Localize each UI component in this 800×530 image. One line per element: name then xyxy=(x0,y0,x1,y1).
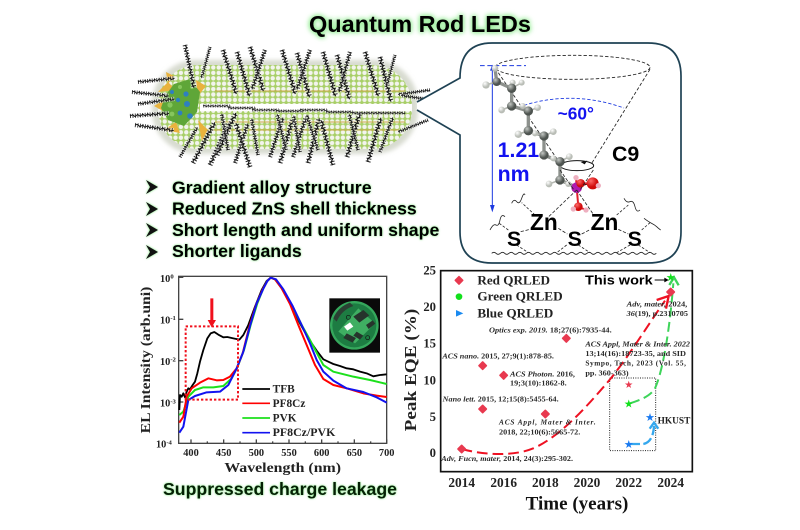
x axis tick labels: 2022 xyxy=(615,475,642,490)
plot frame xyxy=(441,271,692,472)
x axis tick labels: 2020 xyxy=(574,475,601,490)
leakage highlight box xyxy=(186,326,238,400)
length arrow 1.21 nm: nm xyxy=(498,162,530,186)
green trend arrow xyxy=(630,277,679,403)
angle label: ~60° xyxy=(558,103,594,123)
y axis tick labels: 5 xyxy=(430,410,436,424)
ZnS surface labels: Zn xyxy=(530,209,558,235)
x axis tick labels: 700 xyxy=(379,448,394,459)
EL spectrum chart xyxy=(138,274,394,476)
y axis tick labels: 10 xyxy=(423,373,436,387)
HKUST dotted box xyxy=(610,378,656,451)
legend: PVK xyxy=(273,412,297,424)
x axis title: Wavelength (nm) xyxy=(224,461,341,476)
x axis tick labels: 2018 xyxy=(532,475,559,490)
blue data points xyxy=(623,412,655,450)
ZnS surface bonds xyxy=(490,170,661,254)
illustration: quantum rod with ligands xyxy=(130,45,433,167)
citations: Adv, mater, 2024, xyxy=(626,300,688,309)
plot frame and ticks xyxy=(179,276,387,443)
60 degree dashed arc xyxy=(524,98,624,108)
length arrow 1.21 nm xyxy=(480,65,539,212)
red arrow xyxy=(208,298,216,327)
y axis tick labels: 10 xyxy=(160,399,170,410)
x axis tick labels: 500 xyxy=(249,448,264,459)
left ligands xyxy=(130,77,175,131)
citations: Nano lett. 2015, 12;15(8):5455-64. xyxy=(442,394,559,403)
legend xyxy=(242,383,336,439)
citations: pp. 360-363) xyxy=(585,368,629,377)
y axis title: Peak EQE (%) xyxy=(401,309,420,431)
y axis tick labels: -3 xyxy=(170,398,177,405)
red trend arrow xyxy=(462,296,669,454)
citations: Optics exp. 2019. 18;27(6):7935-44. xyxy=(489,325,612,334)
x axis tick labels: 650 xyxy=(347,448,362,459)
blue data points: ★ xyxy=(645,412,655,423)
legend: Blue QRLED xyxy=(477,305,553,320)
chain label C9: C9 xyxy=(612,142,639,166)
ZnS surface labels: S xyxy=(628,227,642,251)
citations: 2018, 22;10(6):5665-72. xyxy=(499,428,581,437)
x axis title: Time (years) xyxy=(526,494,628,515)
y axis tick labels: 10 xyxy=(160,274,170,285)
bullet 4: Shorter ligands xyxy=(172,241,302,261)
PF8Cz curve xyxy=(179,278,387,423)
callout bubble: ligand detail xyxy=(417,43,681,263)
y axis tick labels xyxy=(423,263,436,460)
EQE timeline chart xyxy=(401,263,692,515)
y axis tick labels: 0 xyxy=(430,446,436,460)
green data points: ★ xyxy=(623,399,633,410)
legend: PF8Cz/PVK xyxy=(273,427,336,439)
citations: ACS Appl, Mater & Inter. xyxy=(498,418,596,427)
legend: Green QRLED xyxy=(477,289,563,304)
caption: suppressed charge leakage: Suppressed charge leakage xyxy=(163,479,397,499)
y axis tick labels: 25 xyxy=(423,263,436,277)
HKUST label: HKUST xyxy=(658,416,691,426)
right ligands xyxy=(398,89,433,133)
y axis tick labels: -2 xyxy=(170,357,177,364)
y axis tick labels: 15 xyxy=(423,337,436,351)
central ligands xyxy=(203,105,406,114)
blue data points: ★ xyxy=(623,439,633,450)
y axis tick labels: 20 xyxy=(423,300,436,314)
rotation arrow xyxy=(560,161,594,171)
legend xyxy=(477,272,563,320)
legend: TFB xyxy=(273,383,295,395)
y axis tick labels xyxy=(156,274,177,451)
ZnS surface labels: Zn xyxy=(591,209,618,235)
PF8Cz/PVK curve xyxy=(179,278,387,433)
feature bullet list xyxy=(146,178,439,261)
citations: Sympo, Tech, 2023 (Vol. 55, xyxy=(585,359,686,368)
bullet 1: Gradient alloy structure xyxy=(172,178,372,198)
rod lattice body xyxy=(152,60,418,154)
red star 2022: ★ xyxy=(624,380,633,391)
ZnS surface labels: S xyxy=(507,227,521,251)
rod core xyxy=(154,72,208,142)
legend: PF8Cz xyxy=(273,398,305,410)
TFB curve xyxy=(179,278,387,410)
green data points xyxy=(623,273,675,410)
x axis tick labels: 2024 xyxy=(657,475,684,490)
cone dashed outline xyxy=(495,55,650,163)
y axis tick labels: -4 xyxy=(166,439,173,446)
citations: 13;14(16):18723-35, and SID xyxy=(585,349,686,358)
y axis tick labels: -1 xyxy=(170,315,176,322)
top ligands xyxy=(184,45,396,102)
x axis tick labels: 600 xyxy=(314,448,329,459)
legend: Red QRLED xyxy=(477,272,550,287)
rod central band xyxy=(200,104,412,111)
y axis tick labels: 10 xyxy=(160,315,170,326)
citations: ACS nano. 2015, 27;9(1):878-85. xyxy=(441,351,554,360)
bottom ligands xyxy=(179,112,393,167)
citations: 19;3(10):1862-8. xyxy=(510,379,567,388)
blue trend arrow xyxy=(630,423,658,444)
bullet 2: Reduced ZnS shell thickness xyxy=(172,198,417,218)
x axis tick labels: 2014 xyxy=(448,475,475,490)
x axis tick labels xyxy=(448,475,684,490)
citations xyxy=(440,300,690,463)
y axis title: EL Intensity (arb.uni) xyxy=(138,287,154,433)
citations: Adv, Fucn, mater, 2014, 24(3):295-302. xyxy=(440,454,573,463)
x axis tick labels: 450 xyxy=(216,448,231,459)
x axis tick labels xyxy=(183,448,394,459)
y axis tick labels: 10 xyxy=(160,357,170,368)
ZnS surface labels: S xyxy=(568,227,582,251)
PVK curve xyxy=(179,278,387,415)
this work label: This work xyxy=(585,273,653,288)
red data points xyxy=(455,277,674,453)
inset device photo xyxy=(329,298,380,353)
green data points: ★ xyxy=(665,273,675,284)
citations: ACS Appl, Mater & Inter. 2022 xyxy=(584,339,690,348)
length arrow 1.21 nm: 1.21 xyxy=(498,138,539,162)
citations: ACS Photon. 2016, xyxy=(509,370,575,379)
molecule xyxy=(482,65,601,213)
bullet 3: Short length and uniform shape xyxy=(172,220,439,240)
x axis tick labels: 2016 xyxy=(490,475,517,490)
y axis tick labels: 0 xyxy=(170,274,174,281)
y axis tick labels: 10 xyxy=(156,440,166,451)
x axis tick labels: 400 xyxy=(183,448,199,459)
citations: 36(19), p.2310705 xyxy=(626,309,688,318)
ZnS surface labels xyxy=(507,209,642,251)
x axis tick labels: 550 xyxy=(281,448,297,459)
title: Quantum Rod LEDs xyxy=(309,11,531,37)
